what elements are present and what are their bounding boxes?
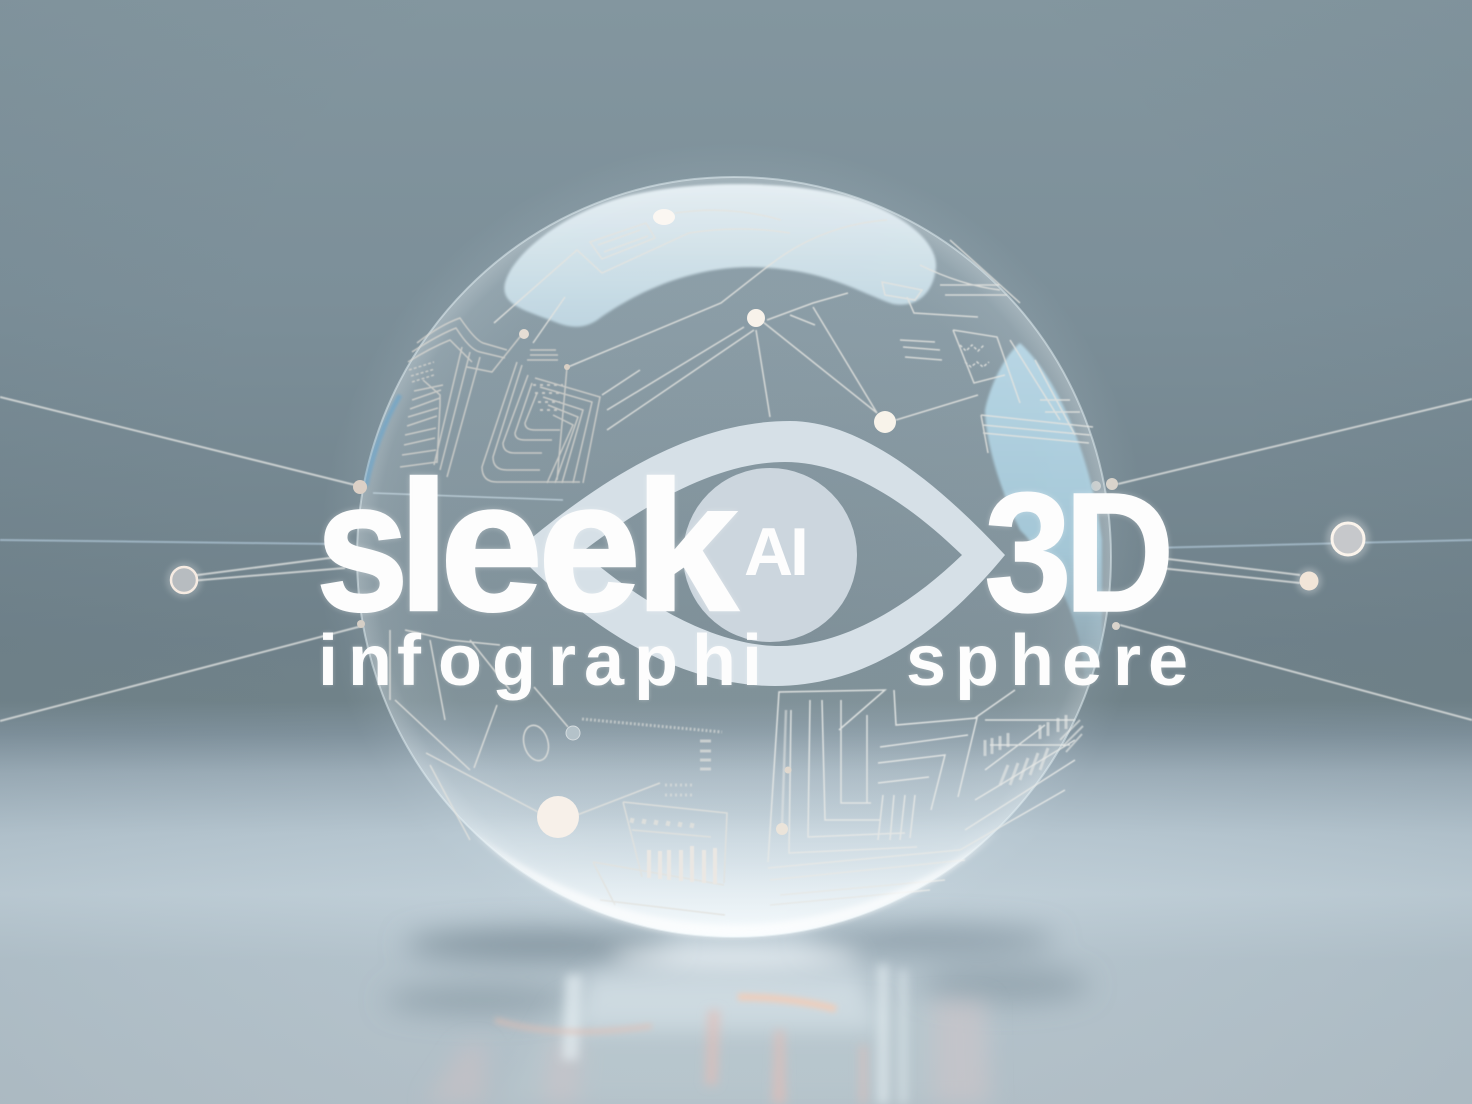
right edge bars <box>985 715 1083 785</box>
title: 3D: D <box>1064 459 1174 648</box>
subtitle: sphere: sphere <box>906 621 1188 701</box>
sphere halo <box>319 142 1149 972</box>
lower left circuit details <box>390 630 727 915</box>
subtitle: infographi: infographi <box>318 621 762 701</box>
title: sleek: s <box>316 444 409 650</box>
glass sphere <box>353 177 1111 937</box>
lower bar chart <box>649 846 715 884</box>
top highlight <box>504 184 936 327</box>
upper left circuit block <box>373 318 600 500</box>
lower right circuit block <box>768 690 1075 905</box>
upper nodes <box>353 209 896 628</box>
left connection lines <box>0 397 362 721</box>
title: 3D <box>984 457 1174 648</box>
floor reflection glow <box>425 947 990 1104</box>
reflected peach strokes <box>495 997 836 1032</box>
title: 3D: 3 <box>984 457 1072 647</box>
upper network lines <box>494 210 1093 453</box>
label: AI: AI <box>744 514 809 590</box>
eye icon <box>515 421 1005 686</box>
eye pupil <box>683 468 857 642</box>
right blue highlight <box>985 343 1102 690</box>
right nodes <box>1091 478 1370 630</box>
floor reflection streaks <box>562 965 906 1104</box>
left blue rim <box>366 395 400 486</box>
lower nodes <box>537 726 792 838</box>
left node <box>166 562 202 598</box>
lower rim glow <box>470 830 1000 937</box>
title: sleek: leek <box>398 444 739 650</box>
sphere floor shadow <box>385 926 1090 1014</box>
right connection lines <box>1118 399 1472 720</box>
